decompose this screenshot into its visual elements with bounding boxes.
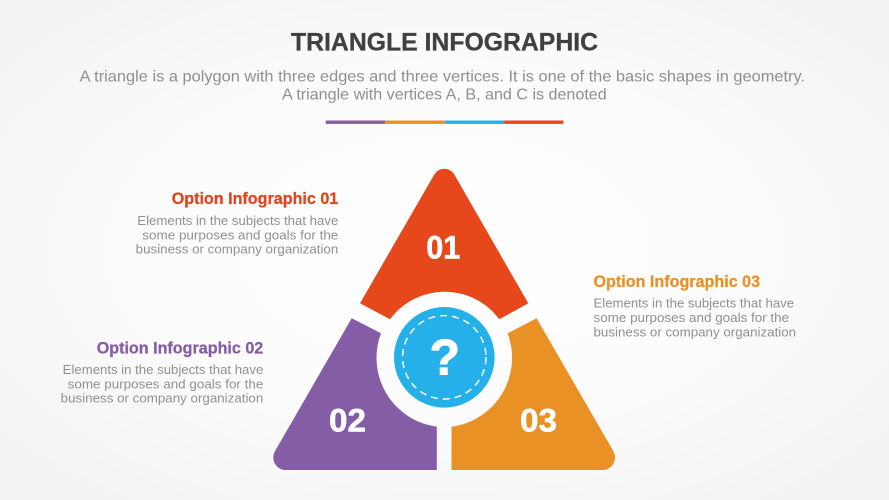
number 01: 01: [426, 229, 460, 265]
icon: center question mark circle: ?: [430, 330, 460, 386]
description: option 01: business or company organization: [136, 243, 338, 257]
panel: option 02 text: [61, 339, 263, 406]
heading: option 02: Option Infographic 02: [97, 339, 263, 357]
description: option 03: some purposes and goals for the: [594, 311, 789, 325]
triangle diagram: [273, 169, 615, 470]
panel: option 03 text: [594, 273, 796, 339]
description: option 02: [61, 363, 263, 406]
colored divider bar: [326, 120, 563, 124]
segment 02: left purple: [273, 318, 437, 470]
description: option 03: [594, 297, 796, 339]
description: option 02: business or company organization: [61, 392, 263, 406]
segment 03: right orange: [452, 318, 615, 470]
number 02: 02: [329, 403, 366, 439]
subtitle: A triangle is a polygon with three edges and three vertices. It is one of the basic shapes in geometry.: [80, 69, 805, 86]
description: option 01: [136, 214, 338, 257]
segment 01: top red: [360, 169, 528, 319]
title: TRIANGLE INFOGRAPHIC: [291, 29, 598, 57]
description: option 03: Elements in the subjects that have: [594, 297, 794, 311]
icon: center question mark circle: [394, 307, 495, 408]
description: option 03: business or company organization: [594, 325, 796, 339]
number 03: 03: [520, 403, 557, 439]
heading: option 01: Option Infographic 01: [172, 190, 338, 208]
description: option 01: Elements in the subjects that have: [137, 214, 338, 228]
subtitle: [80, 69, 805, 103]
panel: option 01 text: [136, 190, 338, 257]
subtitle: A triangle with vertices A, B, and C is denoted: [282, 86, 607, 103]
heading: option 03: Option Infographic 03: [594, 273, 760, 291]
description: option 01: some purposes and goals for the: [142, 228, 338, 242]
description: option 02: some purposes and goals for the: [68, 377, 263, 391]
description: option 02: Elements in the subjects that have: [63, 363, 263, 377]
